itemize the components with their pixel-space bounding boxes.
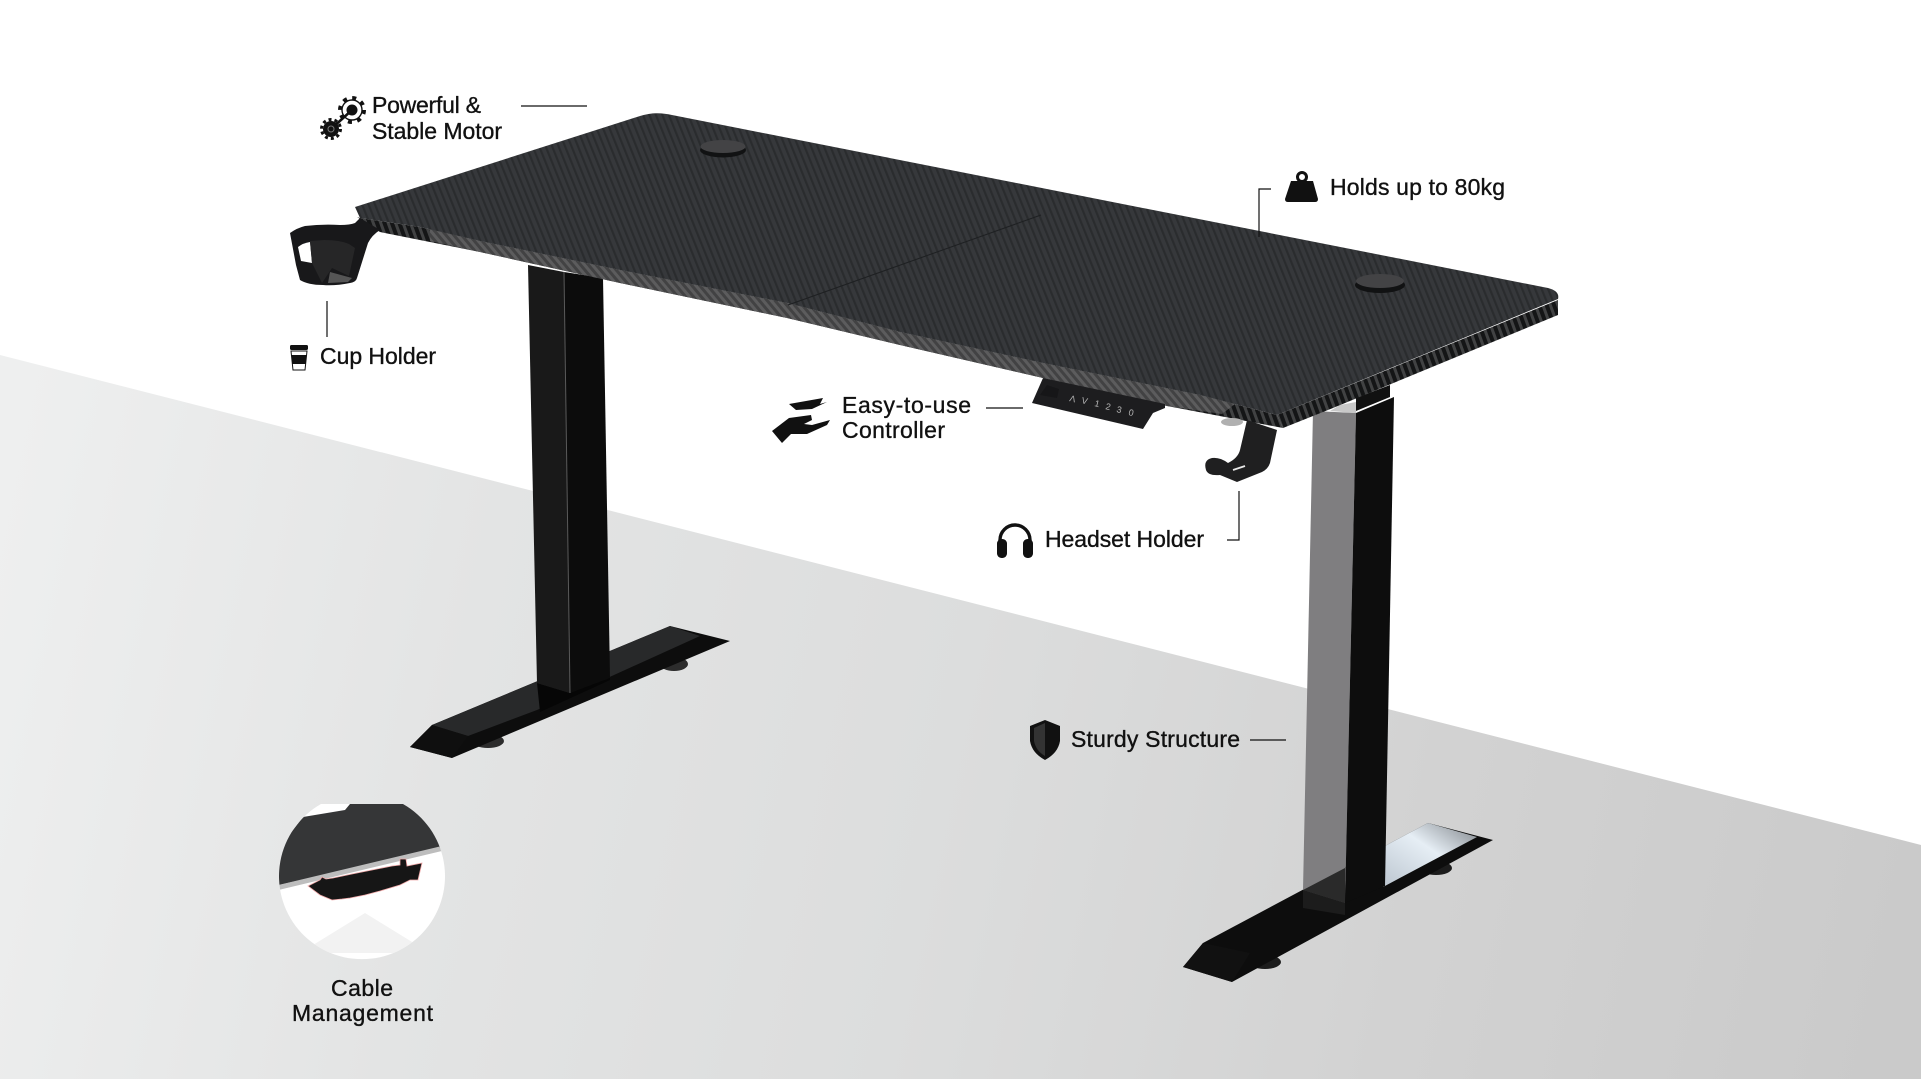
leader lines (327, 106, 1286, 740)
background: grey diagonal floor (0, 355, 1921, 1079)
label: cup holder (290, 343, 436, 370)
tabletop: carbon fibre desk surface (355, 113, 1558, 428)
controller button labels: V (1081, 395, 1089, 406)
controller button labels: 2 (1105, 401, 1112, 412)
icon: motor gears (322, 98, 364, 138)
text: cup holder: Cup Holder (320, 343, 436, 369)
controller button labels (1069, 393, 1135, 418)
label: sturdy structure (1030, 720, 1240, 760)
icon: weight (1285, 172, 1318, 202)
cable grommet (700, 140, 746, 158)
left desk leg (410, 265, 730, 758)
controller button labels: 3 (1116, 404, 1123, 415)
label: holds up to 80kg (1285, 172, 1505, 202)
text: easy-to-use controller: Controller (842, 417, 945, 443)
text: holds up to 80kg: Holds up to 80kg (1330, 174, 1505, 200)
icon: shield (1030, 720, 1060, 760)
text: powerful and stable motor: Stable Motor (372, 118, 502, 144)
label: easy-to-use controller (772, 392, 971, 443)
text: sturdy structure: Sturdy Structure (1071, 726, 1240, 752)
text: powerful and stable motor: Powerful & (372, 92, 481, 118)
text: easy-to-use controller (842, 392, 971, 443)
text: cable management: Management (292, 1000, 434, 1026)
right desk leg (1183, 385, 1493, 982)
label: headset holder (997, 525, 1204, 558)
cup holder (290, 218, 380, 285)
text: cable management: Cable (331, 975, 393, 1001)
icon: takeaway cup (290, 345, 308, 370)
headset holder hook (1205, 418, 1277, 482)
icon: headphones (997, 525, 1033, 558)
cable management inset (279, 804, 445, 1026)
controller button labels: 0 (1128, 407, 1135, 418)
controller button labels: 1 (1094, 398, 1101, 409)
text: headset holder: Headset Holder (1045, 526, 1204, 552)
controller panel (1032, 378, 1165, 429)
text: easy-to-use controller: Easy-to-use (842, 392, 971, 418)
inset circle photo (279, 804, 445, 959)
text: cable management (292, 975, 434, 1026)
cable tray (308, 859, 422, 900)
icon: hand with feather (772, 398, 830, 443)
text: powerful and stable motor (372, 92, 502, 144)
cable grommet (1355, 274, 1405, 293)
controller button labels: Λ (1069, 393, 1077, 404)
label: powerful and stable motor (322, 92, 502, 144)
